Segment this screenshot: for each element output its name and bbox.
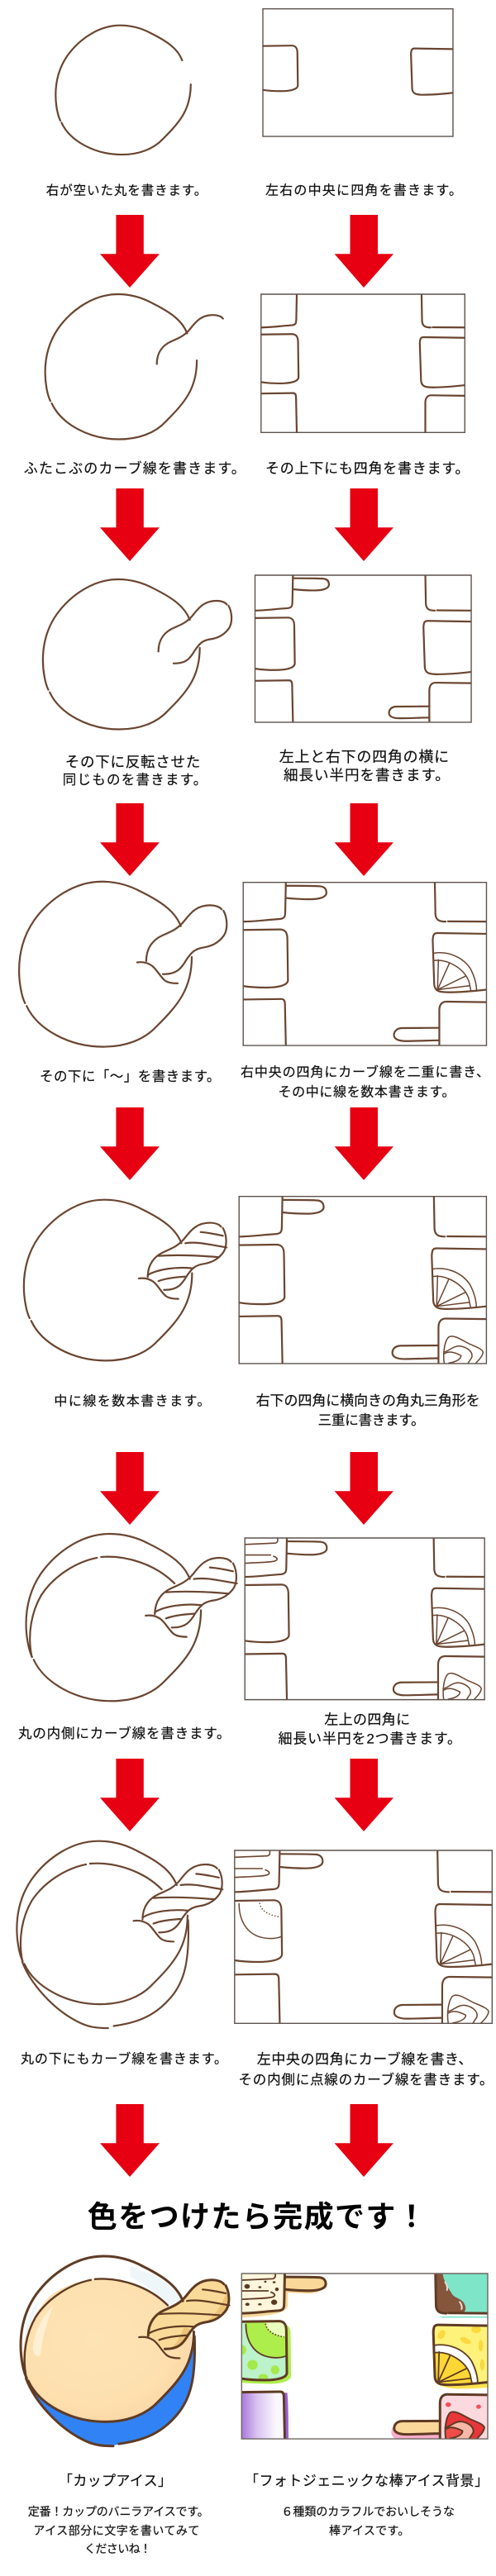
strawberry popsicle bottom right [440, 2394, 488, 2439]
caption 7 right [238, 2051, 493, 2088]
arrow 5 left [100, 1452, 160, 1525]
caption 2 left: ふたこぶのカーブ線を書きます。 [24, 459, 246, 476]
kiwi popsicle middle left [239, 2321, 291, 2383]
step 7 left: lower curve added [17, 1841, 222, 2028]
step 2 right: frame with six squares [261, 294, 465, 432]
step 6 right: bars added [245, 1538, 484, 1700]
caption 3 left: その下に反転させた [65, 754, 200, 770]
arrow 6 left [100, 1759, 160, 1831]
lavender popsicle bottom left [241, 2392, 289, 2439]
handle shading [169, 2293, 229, 2349]
caption 4 right: 右中央の四角にカーブ線を二重に書き、 [241, 1064, 489, 1079]
caption 5 right: 右下の四角に横向きの角丸三角形を [256, 1393, 480, 1408]
caption 6 left: 丸の内側にカーブ線を書きます。 [18, 1725, 230, 1741]
arrow 4 right [335, 1107, 393, 1180]
arrow 7 left [100, 2104, 160, 2177]
step 6 left: inner curve added [26, 1534, 237, 1701]
caption 2 right: その上下にも四角を書きます。 [265, 461, 470, 476]
arrow 5 right [335, 1452, 393, 1525]
caption 4 left: その下に「～」を書きます。 [40, 1069, 220, 1084]
caption 4 right [241, 1064, 489, 1099]
step 2 left: circle with curve [45, 294, 223, 440]
description left [28, 2505, 209, 2555]
caption 5 right [256, 1393, 480, 1428]
caption 3 right [279, 749, 450, 783]
caption 3 right: 細長い半円を書きます。 [284, 767, 450, 783]
caption 6 right [278, 1712, 461, 1747]
caption 5 left: 中に線を数本書きます。 [54, 1393, 210, 1408]
caption 1 left: 右が空いた丸を書きます。 [46, 183, 207, 198]
heading: 色をつけたら完成です！ [88, 2200, 427, 2233]
description left: くださいね！ [84, 2542, 151, 2555]
caption 3 left: 同じものを書きます。 [63, 772, 207, 788]
step 7 right: kiwi curve added [235, 1850, 492, 2023]
description left: アイス部分に文字を書いてみて [33, 2524, 199, 2537]
arrow 1 right [335, 215, 393, 288]
caption 6 right: 左上の四角に [324, 1712, 410, 1727]
description right: 棒アイスです。 [329, 2524, 409, 2537]
ice cream [23, 2278, 192, 2421]
arrow 2 right [335, 488, 393, 561]
arrow 6 right [335, 1759, 393, 1831]
caption 7 right: その内側に点線のカーブ線を書きます。 [238, 2071, 493, 2088]
lemon popsicle middle right [433, 2325, 488, 2389]
caption 6 right: 細長い半円を2つ書きます。 [278, 1731, 461, 1747]
arrow 1 left [100, 215, 160, 288]
blue cup band [26, 2336, 195, 2445]
colored cup ice cream [21, 2256, 229, 2446]
stick handle [148, 2280, 229, 2349]
result title left: 「カップアイス」 [59, 2473, 172, 2489]
arrow 3 right [335, 803, 393, 876]
chocolate popsicle top right [436, 2274, 488, 2318]
description right: ６種類のカラフルでおいしそうな [281, 2505, 455, 2518]
result title right: 「フォトジェニックな棒アイス背景」 [245, 2473, 489, 2489]
vanilla popsicle top left [241, 2274, 289, 2317]
colored popsicle background [239, 2274, 488, 2439]
caption 7 left: 丸の下にもカーブ線を書きます。 [21, 2051, 227, 2066]
caption 5 right: 三重に書きます。 [318, 1412, 425, 1428]
caption 7 right: 左中央の四角にカーブ線を書き、 [257, 2051, 472, 2068]
caption 3 left [63, 754, 207, 788]
step 5 right: strawberry added [239, 1197, 486, 1364]
frame [241, 2274, 488, 2439]
caption 3 right: 左上と右下の四角の横に [279, 749, 449, 765]
pale blue wash [24, 2266, 183, 2369]
description left: 定番！カップのバニラアイスです。 [28, 2505, 209, 2518]
step 3 left: mirrored curve [43, 579, 231, 730]
step 1 right: frame with middle squares [263, 9, 453, 136]
caption 1 right: 左右の中央に四角を書きます。 [265, 183, 462, 198]
arrow 2 left [100, 488, 160, 561]
step 4 right: orange slice added [243, 883, 486, 1045]
step 3 right: sticks added [255, 575, 471, 722]
arrow 3 left [100, 803, 160, 876]
description right [281, 2505, 455, 2537]
highlight [32, 2306, 53, 2356]
step 4 left: wave added [19, 882, 227, 1047]
step 1 left: open circle [55, 26, 191, 155]
top stick [286, 2278, 325, 2293]
ink lines [21, 2256, 229, 2446]
arrow 7 right [335, 2104, 393, 2177]
arrow 4 left [100, 1107, 160, 1180]
ink lines [241, 2274, 488, 2439]
caption 4 right: その中に線を数本書きます。 [278, 1084, 455, 1099]
step 5 left: stripes added [24, 1200, 227, 1360]
bottom stick [391, 2427, 439, 2438]
